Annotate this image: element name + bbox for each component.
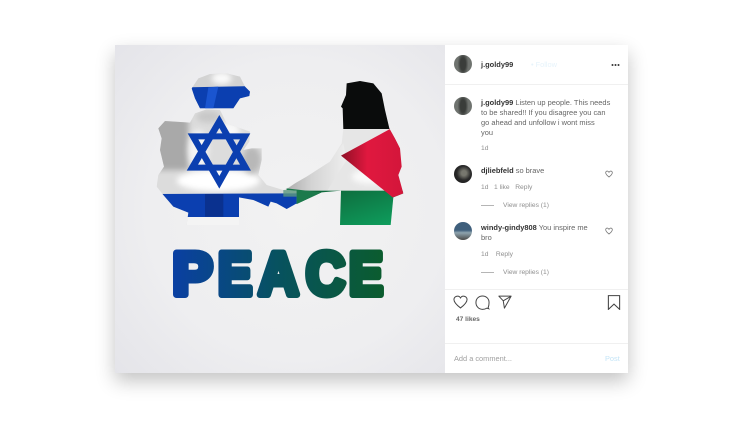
caption text: j.goldy99 Listen up people. This needs	[481, 98, 610, 107]
caption time: 1d	[481, 145, 488, 152]
post image panel	[115, 45, 445, 373]
header avatar	[454, 55, 472, 73]
caption text: you	[481, 128, 493, 137]
icon: heart	[454, 296, 468, 308]
comment 1 meta: 1d 1 like Reply	[481, 184, 532, 191]
figure: Israeli flag silhouette	[157, 74, 297, 217]
PEACE wordmark: P	[172, 240, 212, 308]
PEACE wordmark: E	[218, 240, 252, 308]
header username: j.goldy99	[481, 60, 513, 69]
PEACE wordmark: C	[306, 240, 345, 308]
comment 2 text: windy-gindy808 You inspire me	[481, 223, 588, 232]
add a comment input: Add a comment...	[454, 354, 512, 363]
PEACE wordmark	[172, 240, 383, 308]
comment 2 view replies: View replies (1)	[503, 269, 549, 276]
comment 1 like icon	[605, 170, 613, 178]
caption avatar	[454, 97, 472, 115]
comment 2 meta: 1d Reply	[481, 251, 513, 258]
caption text: to be shared!! If you disagree you can	[481, 108, 605, 117]
icon: share	[498, 296, 512, 309]
comments panel	[445, 45, 628, 373]
follow link: • Follow	[531, 60, 557, 69]
likes count: 47 likes	[456, 316, 480, 323]
comment 2 text: bro	[481, 233, 492, 242]
comment 2 text	[481, 223, 588, 242]
PEACE wordmark: A	[258, 240, 298, 308]
figure: Palestinian flag silhouette	[284, 81, 404, 225]
comment 2 like icon	[605, 228, 613, 234]
PEACE wordmark: E	[349, 240, 383, 308]
comment 1 view replies: View replies (1)	[503, 202, 549, 209]
comment 1 text: djliebfeld so brave	[481, 166, 544, 175]
post button: Post	[605, 354, 620, 363]
icon: bookmark	[608, 295, 620, 310]
more options icon	[612, 64, 620, 66]
post card	[115, 45, 628, 373]
illustration: handshake of flag silhouettes	[157, 74, 404, 225]
icon: comment	[475, 296, 490, 310]
comment 1 avatar	[454, 165, 472, 183]
caption text: go ahead and unfollow i wont miss	[481, 118, 595, 127]
caption text	[480, 98, 610, 137]
comment 2 avatar	[454, 222, 472, 240]
